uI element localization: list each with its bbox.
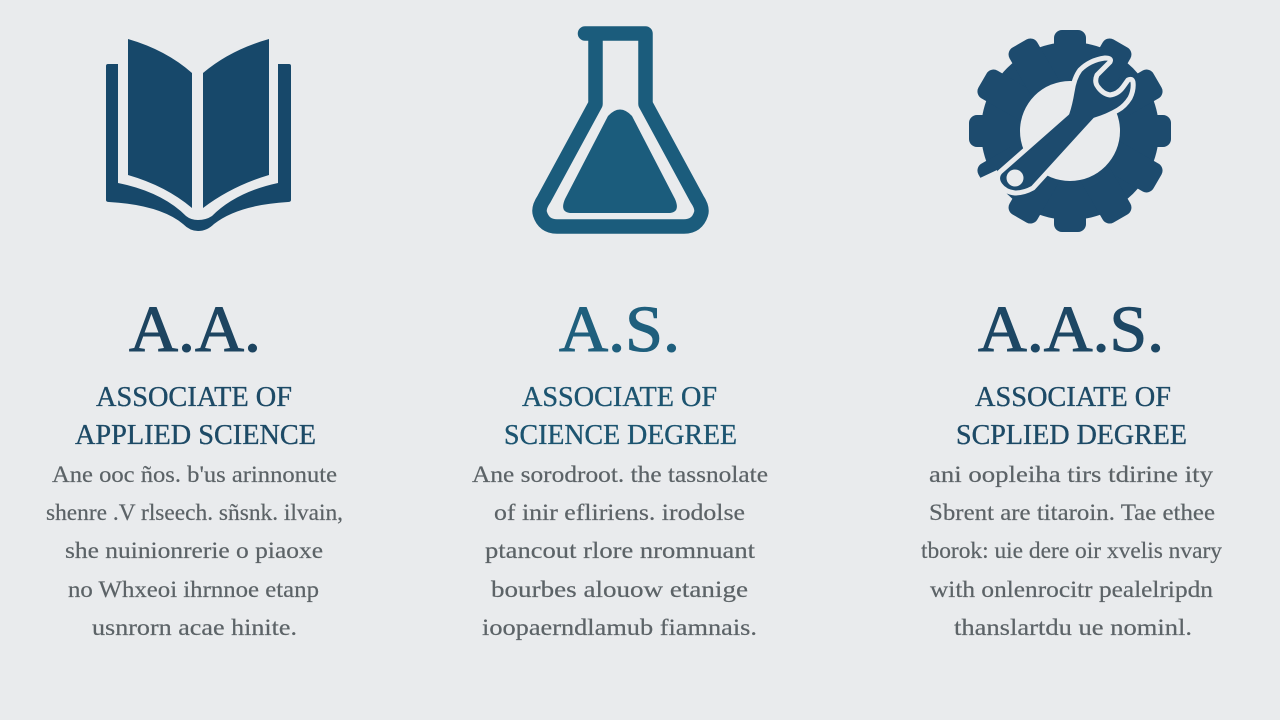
text block: A.S. description: ioopaerndlamub fiamnais. (482, 615, 757, 640)
subheading: Associate of Scplied Degree (956, 382, 1187, 451)
heading: A.A.: A.A. (129, 293, 261, 366)
icon: open book (106, 39, 291, 231)
text block: A.A. description: usnrorn acae hinite. (92, 615, 297, 640)
panel: A.A. degree (46, 39, 343, 640)
icon: lab flask (540, 34, 702, 226)
text block: A.A. description (46, 462, 343, 640)
text block: A.S. description: ptancout rlore nromnuant (485, 538, 756, 563)
panel: A.A.S. degree (921, 30, 1222, 640)
subheading: Associate of Applied Science (75, 382, 316, 451)
text block: A.A.S. description: with onlenrocitr pealelripdn (930, 577, 1214, 602)
subheading: Associate of Science Degree (504, 382, 737, 451)
text block: A.A.S. description: tborok: uie dere oir xvelis nvary (921, 538, 1222, 563)
text block: A.S. description: of inir efliriens. irodolse (494, 500, 745, 525)
text block: A.S. description: Ane sorodroot. the tassnolate (472, 462, 768, 487)
text block: A.A.S. description: thanslartdu ue nominl. (954, 615, 1192, 640)
subheading: Associate of Science Degree: ASSOCIATE OF (522, 382, 717, 413)
subheading: Associate of Applied Science: APPLIED SCIENCE (75, 420, 316, 451)
text block: A.A. description: Ane ooc ños. b'us arinnonute (52, 462, 337, 487)
subheading: Associate of Science Degree: SCIENCE DEGREE (504, 420, 737, 451)
heading: A.A.S.: A.A.S. (978, 293, 1164, 366)
subheading: Associate of Applied Science: ASSOCIATE OF (96, 382, 292, 413)
heading: A.S.: A.S. (559, 293, 680, 366)
text block: A.S. description (472, 462, 768, 640)
icon: gear with wrench (969, 30, 1171, 232)
subheading: Associate of Scplied Degree: ASSOCIATE OF (975, 382, 1171, 413)
text block: A.A. description: shenre .V rlseech. sñsnk. ilvain, (46, 500, 343, 525)
text block: A.A. description: she nuinionrerie o piaoxe (65, 538, 323, 563)
text block: A.S. description: bourbes alouow etanige (491, 577, 748, 602)
text block: A.A.S. description: ani oopleiha tirs tdirine ity (929, 462, 1214, 487)
text block: A.A.S. description: Sbrent are titaroin. Tae ethee (929, 500, 1215, 525)
panel: A.S. degree (472, 34, 768, 640)
text block: A.A.S. description (921, 462, 1222, 640)
subheading: Associate of Scplied Degree: SCPLIED DEGREE (956, 420, 1187, 451)
text block: A.A. description: no Whxeoi ihrnnoe etanp (68, 577, 319, 602)
